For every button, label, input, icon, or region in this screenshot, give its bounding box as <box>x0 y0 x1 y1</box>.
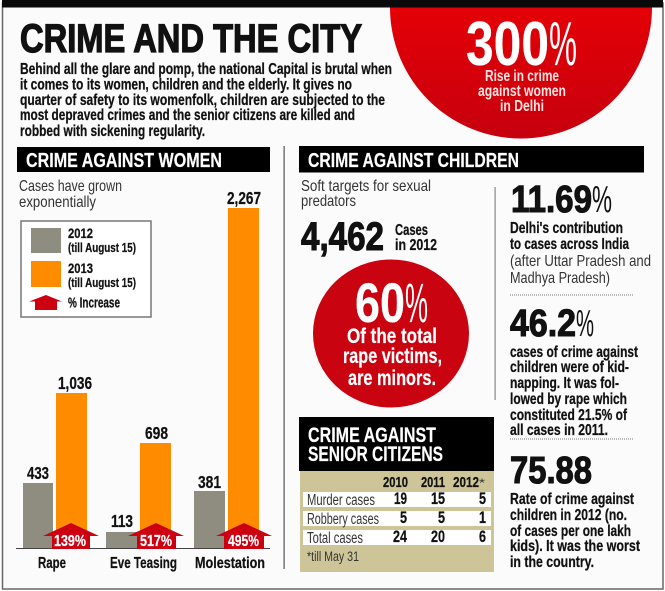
bars: rape: 1,036 <box>58 373 92 393</box>
table: 5 <box>479 489 486 508</box>
table: * <box>479 476 485 490</box>
stat: 11.69%: % <box>592 179 612 221</box>
table: 2010 <box>383 474 408 491</box>
red callout: 300%: against women <box>478 83 566 100</box>
legend: 2012 <box>68 225 93 241</box>
stat: 75.88: in the country. <box>510 554 594 571</box>
stat: 46.2%: % <box>576 303 594 345</box>
red circle: 60%: Of the total <box>347 325 437 348</box>
arrow: 517% <box>128 523 184 550</box>
arrow: 517%: 517% <box>140 533 172 550</box>
bars: molestation: 381 <box>198 472 221 492</box>
table: 19 <box>394 489 407 508</box>
bars: eve teasing: 698 <box>145 423 168 443</box>
intro text: quarter of safety to its womenfolk, children are subjected to the <box>20 92 385 109</box>
red callout: 300%: 300 <box>466 10 549 79</box>
subheading: cases have grown: Cases have grown <box>19 178 122 195</box>
table: Total cases <box>307 530 363 547</box>
stat: 4,462 cases: in 2012 <box>395 237 437 254</box>
heading: senior citizens <box>299 417 494 471</box>
bars: molestation: 2,267 <box>227 188 261 208</box>
stat: 46.2%: all cases in 2011. <box>510 422 608 439</box>
table: 2011 <box>421 474 445 491</box>
category labels: Eve Teasing <box>110 555 177 572</box>
stat: 75.88: children in 2012 (no. <box>510 507 627 524</box>
red circle: 60%: are minors. <box>348 367 436 390</box>
heading: crime against children <box>299 146 644 172</box>
table: 20 <box>431 527 445 546</box>
title: CRIME AND THE CITY <box>20 17 362 61</box>
stat: 46.2%: napping. It was fol- <box>510 375 619 392</box>
legend: 2013 <box>68 260 93 276</box>
bars: rape: 433 <box>27 463 49 483</box>
stat: 11.69%: Delhi's contribution <box>510 220 623 237</box>
panel: crime against women <box>16 147 272 572</box>
heading: crime against children: CRIME AGAINST CHILDREN <box>308 150 519 172</box>
table: 2012 <box>453 474 479 491</box>
legend: (till August 15) <box>68 240 136 255</box>
bars: rape <box>23 373 92 548</box>
legend: (till August 15) <box>68 275 136 290</box>
stat: 4,462 cases: Cases <box>395 222 428 239</box>
arrow: 495% <box>216 523 272 550</box>
heading: senior citizens: CRIME AGAINST <box>308 424 436 447</box>
panel: crime against senior citizens <box>299 417 494 572</box>
subheading: cases have grown <box>19 178 122 211</box>
stat: 46.2%: constituted 21.5% of <box>510 407 628 424</box>
intro text: Behind all the glare and pomp, the national Capital is brutal when <box>20 61 392 78</box>
table: 1 <box>479 508 486 527</box>
stat: 4,462 cases: 4,462 <box>301 215 384 259</box>
subheading: soft targets: Soft targets for sexual <box>301 178 431 195</box>
red circle: 60%: rape victims, <box>343 345 442 368</box>
table: 5 <box>400 508 407 527</box>
red callout: 300%: % <box>549 10 577 79</box>
panel: crime against children <box>299 146 651 571</box>
bars: molestation <box>194 188 261 548</box>
stat: 46.2%: lowed by rape which <box>510 391 627 408</box>
red circle: 60%: 60 <box>355 271 405 334</box>
stat: 75.88: 75.88 <box>510 450 592 492</box>
legend <box>21 221 151 317</box>
table: 5 <box>438 508 445 527</box>
bar chart <box>16 188 272 572</box>
red callout: 300% <box>390 8 652 138</box>
stat: 11.69%: 11.69 <box>511 179 592 221</box>
bars: eve teasing: 113 <box>111 511 133 531</box>
subheading: soft targets <box>301 178 431 210</box>
intro text: most depraved crimes and the senior citizens are killed and <box>20 107 355 124</box>
legend: % Increase <box>68 296 120 312</box>
category labels <box>38 555 265 572</box>
heading: crime against women: CRIME AGAINST WOMEN <box>26 150 222 172</box>
heading: senior citizens: SENIOR CITIZENS <box>308 443 443 466</box>
arrow: 139%: 139% <box>54 533 86 550</box>
stat: 46.2%: 46.2 <box>510 303 576 345</box>
table: Robbery cases <box>307 511 379 528</box>
table: 6 <box>479 527 486 546</box>
red callout: 300%: in Delhi <box>500 98 544 115</box>
bars: eve teasing <box>106 423 171 548</box>
subheading: soft targets: predators <box>301 193 356 210</box>
subheading: cases have grown: exponentially <box>19 194 96 211</box>
table: 24 <box>393 527 407 546</box>
stat: 11.69%: Madhya Pradesh) <box>510 270 610 287</box>
table: 15 <box>431 489 445 508</box>
table <box>303 474 491 547</box>
stat: 75.88 <box>510 450 641 571</box>
intro text: robbed with sickening regularity. <box>20 123 205 140</box>
red callout: 300%: Rise in crime <box>485 68 559 85</box>
footnote: *till May 31 <box>307 549 359 564</box>
red circle: 60% <box>313 260 469 408</box>
intro text <box>20 61 392 140</box>
arrow: 495%: 495% <box>228 533 259 550</box>
category labels: Rape <box>38 555 66 572</box>
stat: 46.2% <box>510 303 639 439</box>
arrow: 139% <box>43 523 99 550</box>
stat: 46.2%: children were of kid- <box>510 359 629 376</box>
intro text: it comes to its women, children and the elderly. It gives no <box>20 76 352 94</box>
category labels: Molestation <box>195 555 265 572</box>
stat: 11.69% <box>510 179 651 287</box>
table: Murder cases <box>307 492 375 509</box>
red circle: 60%: % <box>405 271 428 334</box>
